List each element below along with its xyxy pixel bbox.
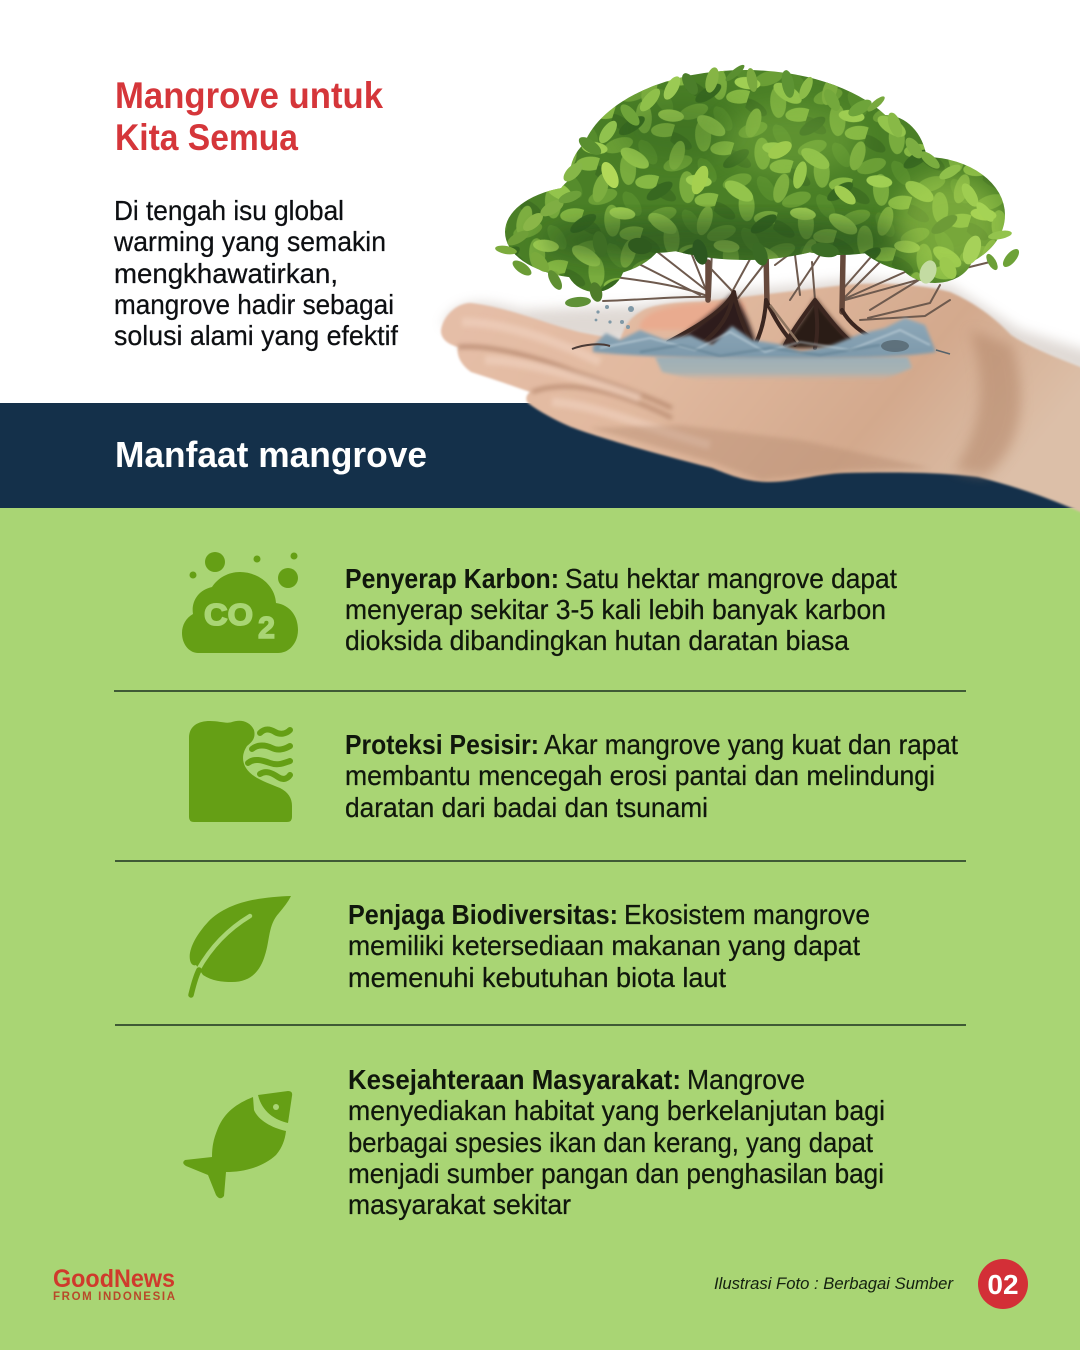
canopy foliage	[505, 70, 1005, 292]
thumb highlight behind roots	[640, 302, 745, 330]
intro paragraph: warming yang semakin	[113, 226, 386, 257]
hand soft halo	[442, 278, 1080, 385]
text: community welfare: Kesejahteraan Masyarakat:	[348, 1064, 681, 1095]
text: biodiversity: memenuhi kebutuhan biota laut	[348, 962, 726, 993]
title: Mangrove untuk	[115, 74, 383, 116]
edge leaves	[494, 63, 1022, 308]
intro paragraph: solusi alami yang efektif	[114, 320, 398, 351]
intro paragraph: mengkhawatirkan,	[114, 258, 338, 289]
benefit 1: carbon absorber	[182, 552, 897, 656]
icon: fish	[183, 1091, 292, 1198]
icon: CO2 cloud: 2	[258, 610, 275, 645]
text: carbon absorber: Satu hektar mangrove dapat	[565, 563, 897, 594]
text: biodiversity: memiliki ketersediaan makanan yang dapat	[348, 930, 860, 961]
benefit 3: biodiversity	[190, 896, 870, 995]
text: carbon absorber: Penyerap Karbon:	[345, 563, 559, 594]
text: coastal protection	[345, 729, 958, 823]
logo: GoodNews from Indonesia: GoodNews	[53, 1265, 175, 1293]
finger creases	[458, 347, 672, 408]
text: coastal protection: daratan dari badai dan tsunami	[345, 792, 708, 823]
text: community welfare: berbagai spesies ikan dan kerang, yang dapat	[348, 1127, 873, 1158]
branches	[598, 250, 990, 320]
page number badge: 02	[987, 1269, 1019, 1300]
text: coastal protection: membantu mencegah erosi pantai dan melindungi	[345, 760, 935, 791]
photo credit: Ilustrasi Foto : Berbagai Sumber	[714, 1274, 954, 1293]
text: community welfare: masyarakat sekitar	[348, 1189, 571, 1220]
green content panel	[0, 508, 1080, 1350]
navy section band	[0, 403, 1080, 508]
text: coastal protection: Akar mangrove yang kuat dan rapat	[544, 729, 958, 760]
text: biodiversity: Ekosistem mangrove	[624, 899, 870, 930]
text: coastal protection: Proteksi Pesisir:	[345, 729, 539, 760]
hand shape	[441, 284, 1080, 525]
benefit 2: coastal protection	[189, 721, 958, 823]
finger highlights	[462, 322, 710, 445]
text: biodiversity: Penjaga Biodiversitas:	[348, 899, 618, 930]
icon: CO2 cloud	[182, 552, 298, 653]
water splash	[572, 305, 950, 381]
page number badge	[978, 1259, 1028, 1309]
wrist shadow	[955, 330, 1021, 476]
text: community welfare: Mangrove	[687, 1064, 805, 1095]
section heading: Manfaat mangrove	[115, 434, 427, 475]
icon: CO2 cloud: CO	[204, 597, 253, 632]
title	[115, 74, 383, 158]
root masses	[668, 292, 880, 348]
text: carbon absorber: menyerap sekitar 3-5 kali lebih banyak karbon	[345, 594, 886, 625]
white header background	[0, 0, 1080, 403]
benefit 4: community welfare	[183, 1064, 885, 1220]
intro paragraph: mangrove hadir sebagai	[114, 289, 394, 320]
icon: leaf	[190, 896, 291, 995]
icon: coast and waves	[189, 721, 292, 822]
intro paragraph	[113, 195, 398, 351]
illustration: mangrove tree	[490, 60, 1022, 381]
intro paragraph: Di tengah isu global	[114, 195, 344, 226]
text: community welfare	[348, 1064, 885, 1220]
text: biodiversity	[348, 899, 870, 993]
text: carbon absorber	[345, 563, 897, 656]
text: community welfare: menyediakan habitat yang berkelanjutan bagi	[348, 1095, 885, 1126]
text: carbon absorber: dioksida dibandingkan hutan daratan biasa	[345, 625, 850, 656]
title: Kita Semua	[115, 116, 299, 158]
illustration: hand	[441, 278, 1080, 525]
text: community welfare: menjadi sumber pangan dan penghasilan bagi	[348, 1158, 884, 1189]
logo: GoodNews from Indonesia: FROM INDONESIA	[53, 1291, 175, 1303]
